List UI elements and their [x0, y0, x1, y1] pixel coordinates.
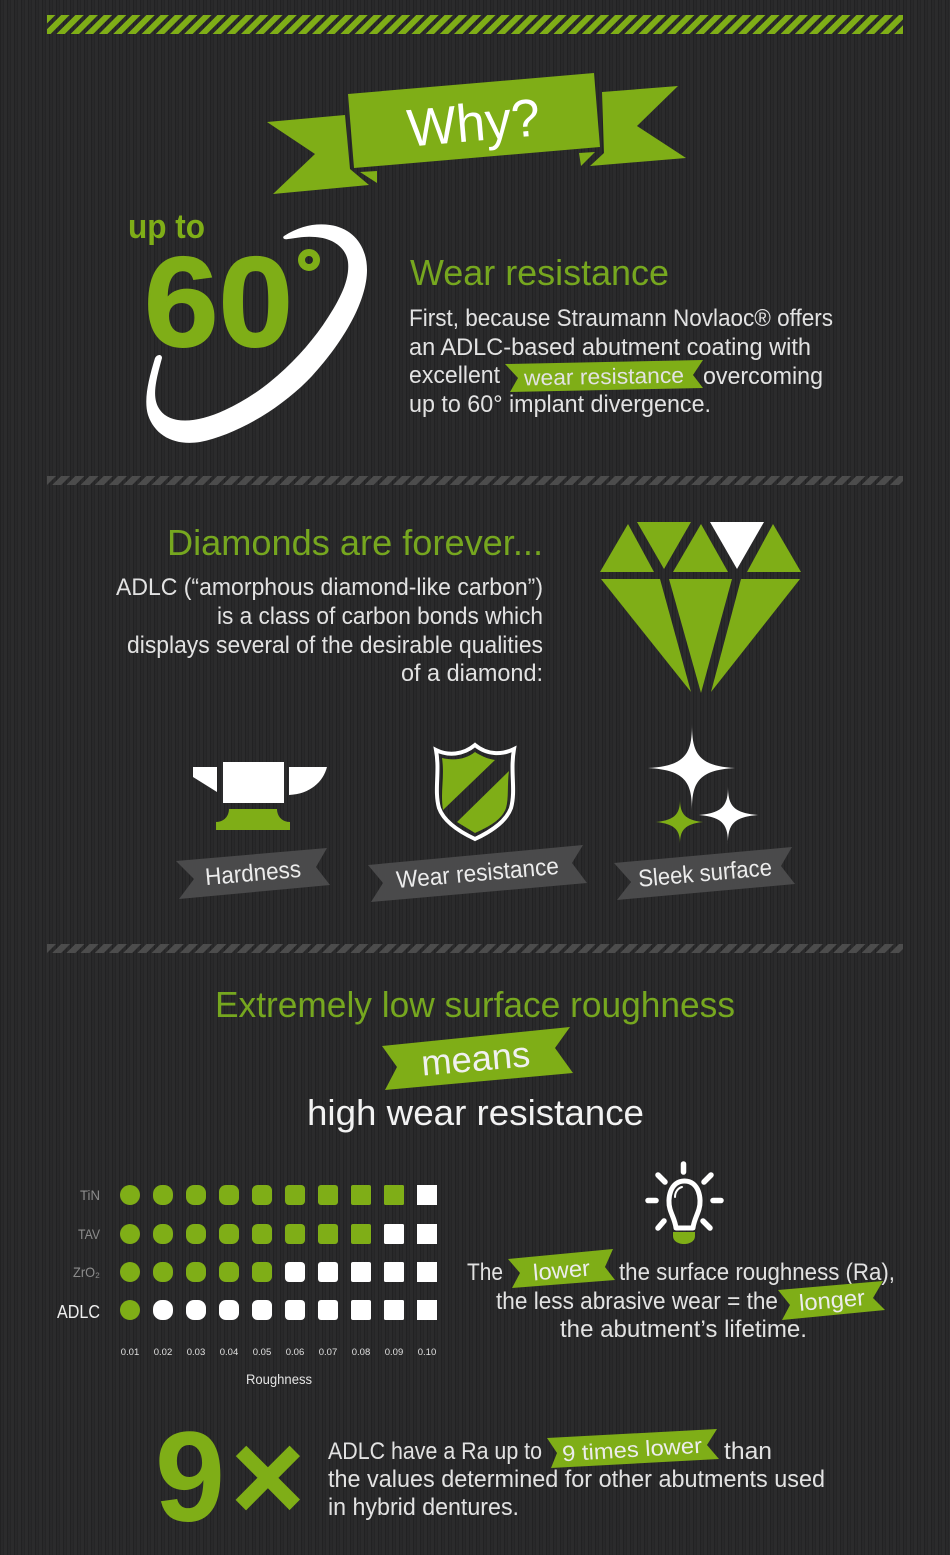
text block: roughness explanation: the surface roughness (Ra),	[619, 1259, 895, 1286]
heading: wear resistance: Wear resistance	[410, 252, 669, 293]
axis values	[121, 1347, 436, 1358]
row labels: TiN	[80, 1187, 100, 1203]
highlight ribbon: wear resistance	[505, 360, 703, 392]
highlight ribbon: lower: lower	[532, 1255, 591, 1285]
row labels: ADLC	[57, 1302, 100, 1322]
row: ADLC	[120, 1300, 437, 1320]
axis title: Roughness	[246, 1372, 312, 1387]
heading: diamonds: Diamonds are forever...	[167, 522, 543, 563]
axis values: 0.01	[121, 1347, 139, 1358]
dot chart: roughness	[57, 1185, 437, 1387]
icon: shield	[436, 745, 514, 839]
row labels: TAV	[78, 1226, 101, 1242]
text block: ADLC Ra: ADLC have a Ra up to	[328, 1438, 542, 1465]
big number: 9x: ×	[231, 1406, 305, 1547]
label ribbon: sleek surface	[614, 847, 795, 900]
axis values: 0.03	[187, 1347, 205, 1358]
title text: Why?	[405, 88, 542, 159]
axis values: 0.08	[352, 1347, 370, 1358]
row labels	[57, 1187, 101, 1322]
panel: diamonds are forever	[116, 522, 801, 902]
degree symbol	[302, 252, 316, 268]
body text: ADLC definition	[116, 574, 543, 687]
highlight ribbon: longer: longer	[798, 1284, 866, 1316]
text block: ADLC Ra: than	[724, 1438, 772, 1465]
row labels: ZrO₂	[73, 1264, 100, 1280]
label ribbon: sleek surface: Sleek surface	[637, 854, 773, 893]
label ribbon: wear resistance	[368, 845, 587, 902]
graphic: up to 60 degrees	[128, 208, 367, 443]
60 number: 60	[144, 231, 293, 374]
axis values: 0.07	[319, 1347, 337, 1358]
body text: ADLC definition: of a diamond:	[401, 660, 543, 687]
icon: diamond	[600, 522, 801, 693]
axis values: 0.10	[418, 1347, 436, 1358]
icon: sparkles	[648, 724, 758, 844]
body text: wear resistance	[409, 305, 833, 418]
highlight ribbon: longer	[778, 1281, 885, 1320]
axis values: 0.09	[385, 1347, 403, 1358]
text block: roughness explanation	[467, 1259, 895, 1343]
body text: wear resistance: excellent	[409, 362, 500, 389]
row: ZrO2	[120, 1262, 437, 1282]
label ribbon: hardness	[176, 848, 330, 899]
big number: 9x: 9	[155, 1406, 225, 1549]
text block: roughness explanation: The	[467, 1259, 503, 1286]
body text: wear resistance: overcoming	[703, 363, 823, 390]
big number: 9x	[155, 1406, 305, 1549]
body text: wear resistance: First, because Straumann Novlaoc® offers	[409, 305, 833, 332]
body text: wear resistance: an ADLC-based abutment coating with	[409, 334, 811, 361]
highlight ribbon: wear resistance: wear resistance	[523, 363, 684, 390]
body text: ADLC definition: is a class of carbon bonds which	[217, 603, 543, 630]
panel: 9 times lower	[155, 1406, 825, 1549]
subheading: high wear resistance: high wear resistance	[307, 1092, 644, 1133]
icon: light bulb	[648, 1164, 721, 1244]
text block: ADLC Ra	[328, 1438, 825, 1521]
ribbon: means	[382, 1027, 573, 1090]
icon: anvil	[193, 762, 327, 830]
axis values: 0.06	[286, 1347, 304, 1358]
axis values: 0.02	[154, 1347, 172, 1358]
label ribbon: wear resistance: Wear resistance	[395, 853, 560, 894]
body text: wear resistance: up to 60° implant divergence.	[409, 391, 711, 418]
highlight ribbon: 9 times lower	[547, 1429, 719, 1468]
label ribbon: hardness: Hardness	[204, 856, 302, 891]
highlight ribbon: 9 times lower: 9 times lower	[561, 1433, 703, 1466]
body text: ADLC definition: ADLC (“amorphous diamond-like carbon”)	[116, 574, 543, 601]
body text: ADLC definition: displays several of the desirable qualities	[127, 632, 543, 659]
heading: extremely low surface roughness: Extremely low surface roughness	[215, 984, 735, 1025]
panel: wear resistance	[128, 208, 833, 443]
up to label: up to	[128, 208, 205, 246]
text block: ADLC Ra: in hybrid dentures.	[328, 1494, 519, 1521]
text block: roughness explanation: the less abrasive wear = the	[496, 1288, 778, 1315]
axis values: 0.04	[220, 1347, 238, 1358]
row: TiN	[120, 1185, 437, 1205]
row: TAV	[120, 1224, 437, 1244]
ribbon: means: means	[419, 1033, 532, 1084]
white swoosh arc	[146, 224, 367, 443]
text block: roughness explanation: the abutment’s lifetime.	[560, 1316, 807, 1343]
text block: ADLC Ra: the values determined for other abutments used	[328, 1466, 825, 1493]
panel: surface roughness	[57, 984, 895, 1387]
axis values: 0.05	[253, 1347, 271, 1358]
highlight ribbon: lower	[508, 1249, 615, 1288]
title ribbon: Why?	[267, 73, 686, 194]
